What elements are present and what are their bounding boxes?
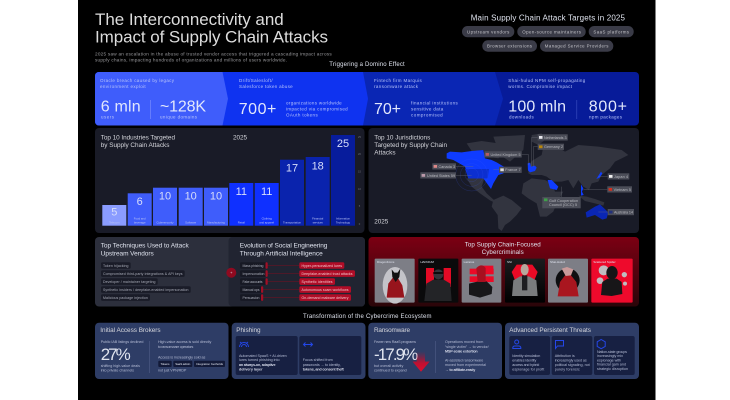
card: identity simulation: Identity simulation	[512, 354, 540, 358]
evolution rows: Impersonation	[242, 272, 265, 276]
card: Scattered Spider	[591, 259, 633, 303]
axis: 20	[358, 152, 361, 156]
card: focus shift	[299, 336, 361, 375]
card: attribution: purely forensic	[555, 367, 580, 371]
heading: evolution	[240, 243, 328, 257]
segment: Drift	[239, 78, 348, 118]
target pills: Upstream vendors	[467, 29, 510, 34]
card: nation-state: Nation-state groups	[597, 350, 627, 354]
country labels: Canada 3	[438, 165, 455, 169]
axis: 0	[359, 222, 361, 226]
axis: 15	[358, 170, 361, 174]
bars: 10	[210, 190, 222, 202]
segment: Oracle: ~128K	[160, 98, 206, 116]
evolution rows: Synthetic identities	[302, 280, 333, 284]
target pills	[462, 26, 634, 52]
card: identity simulation: access and hybrid	[512, 363, 539, 367]
country labels: France 7	[505, 168, 521, 172]
heading: jurisdictions	[374, 134, 447, 156]
card: Lazarus: Lazarus	[464, 260, 475, 264]
bars: Food and	[134, 216, 146, 220]
title: The Interconnectivity and	[95, 10, 284, 29]
axis	[358, 135, 361, 226]
bars: Cybersecurity	[156, 220, 174, 224]
stat: 27%: 27%	[101, 345, 131, 364]
segment: Oracle: Oracle breach caused by legacy	[100, 78, 175, 83]
technique pills: Malicious package injection	[103, 296, 148, 300]
segment: Shai-hulud: 800+	[589, 98, 627, 116]
card: DragonForce: DragonForce	[377, 260, 395, 264]
card: attribution	[552, 336, 592, 375]
technique pills	[101, 262, 191, 301]
stat: 27%: Public IAB listings declined	[101, 340, 143, 344]
segment: Oracle: unique domains	[160, 114, 198, 120]
card: identity simulation: enables identity	[512, 358, 536, 362]
panel: initial access brokers	[95, 323, 228, 379]
access notes: SaaS admin	[175, 362, 191, 366]
heading: evolution: Evolution of Social Engineering	[240, 243, 328, 250]
card: nation-state: strategic disruption	[597, 367, 628, 371]
segment: Shai-hulud: worms. Compromise impact	[508, 84, 573, 89]
heading: techniques	[101, 243, 189, 257]
segment: Oracle	[100, 78, 206, 120]
stat: 27%: into private channels	[101, 368, 134, 372]
icon: user	[513, 340, 521, 348]
card: focus shift: tokens, and consent theft	[303, 367, 344, 371]
card: nation-state: espionage with	[597, 358, 621, 362]
evolution rows: Fake accounts	[242, 280, 263, 284]
heading: jurisdictions: Targeted by Supply Chain	[374, 142, 447, 149]
card: automated SpaaS: delivery layer	[239, 367, 263, 371]
evolution rows: Manual ops	[242, 288, 260, 292]
access notes: Integration footholds	[196, 362, 224, 366]
country labels: Vietnam 5	[614, 188, 631, 192]
heading: cybercriminals: Top Supply Chain-Focused	[465, 242, 541, 248]
country labels	[420, 134, 634, 215]
segment: Drift: OAuth tokens	[286, 112, 318, 118]
ransomware notes	[445, 340, 490, 372]
bars: 11	[261, 186, 272, 198]
technique pills: Token hijacking	[103, 264, 129, 268]
card: nation-state	[594, 336, 635, 375]
ransomware notes: AI-assisted ransomware	[445, 359, 483, 363]
evolution rows: Mass phishing	[242, 264, 264, 268]
card: Lazarus	[462, 259, 501, 303]
segment: Marquis: compromised	[411, 112, 443, 118]
bars: Clothing	[262, 216, 272, 220]
highlighted countries	[447, 150, 608, 220]
card: HAFNIUM	[418, 259, 458, 303]
bars: and apparel	[259, 220, 274, 224]
panel: advanced persistent threats	[505, 323, 639, 379]
card: automated SpaaS: an always-on, adaptive	[239, 363, 276, 367]
stat: -17.9%: continued to expand	[374, 368, 407, 372]
bars: 5	[111, 206, 117, 218]
bars: services	[313, 220, 323, 224]
segment: Marquis: 70+	[374, 101, 401, 118]
segment: Marquis	[374, 78, 458, 118]
segment: Oracle: users	[101, 114, 115, 120]
stat: -17.9%	[374, 340, 418, 372]
AI connector node	[226, 268, 236, 278]
ransomware notes: “single victim” → to vendor/	[445, 345, 490, 349]
segment: Shai-hulud: Shai-hulud NPM self-propagating	[508, 78, 586, 83]
card: Shai-Hulud	[548, 259, 588, 303]
evolution rows	[240, 262, 355, 301]
heading: cybercriminals	[465, 242, 541, 256]
domino banner	[90, 72, 639, 126]
stat: -17.9%: -17.9%	[374, 345, 418, 364]
infographic canvas	[78, 0, 656, 400]
bars: Manufacturing	[207, 220, 225, 224]
evolution rows: Hyper-personalized lures	[302, 264, 342, 268]
segment: Shai-hulud	[508, 78, 627, 120]
evolution rows: Persuasion	[242, 296, 260, 300]
card: identity simulation: espionage for profit	[512, 367, 544, 371]
segment: Drift: Drift/Salesloft/	[239, 78, 273, 83]
AI connector node: +	[230, 270, 233, 275]
country labels: United Kingdom 5	[490, 153, 520, 157]
axis: 10	[358, 187, 361, 191]
bars: Transportation	[283, 220, 301, 224]
card: Shai-Hulud: Shai-Hulud	[550, 260, 565, 264]
segment: Oracle: environment exploit	[100, 84, 146, 89]
panel: cybercriminals	[368, 237, 639, 306]
evolution rows: On-demand malware delivery	[302, 296, 349, 300]
target pills: Browser extensions	[487, 44, 533, 49]
stat: -17.9%: Fewer new RaaS programs	[374, 340, 416, 344]
bars: 10	[185, 190, 197, 202]
ransomware notes: → to affiliate-ready	[445, 368, 476, 372]
heading: Phishing	[236, 327, 261, 334]
segment: Shai-hulud: downloads	[509, 114, 534, 120]
card: focus shift: Focus shifted from	[303, 358, 333, 362]
bars: Software	[185, 220, 197, 224]
stat: 27%	[101, 340, 143, 372]
bars: 6	[137, 196, 143, 208]
criminal cards	[375, 259, 633, 304]
bars: Technology	[336, 220, 351, 224]
card: focus shift: passwords → to identity,	[303, 363, 341, 367]
segment: Shai-hulud: 100 mln	[508, 98, 566, 116]
heading: industries: Top 10 Industries Targeted	[101, 134, 175, 141]
heading: jurisdictions: Top 10 Jurisdictions	[374, 134, 430, 141]
card: attribution: Attribution is	[555, 354, 575, 358]
icon: signal arcs	[240, 342, 248, 347]
icon: chat bubble	[556, 340, 564, 348]
card: HAFNIUM: HAFNIUM	[420, 260, 434, 264]
bars: Financial	[312, 216, 324, 220]
heading: techniques: Upstream Vendors	[101, 250, 154, 257]
bars: 10	[159, 190, 171, 202]
access notes: Tokens	[160, 362, 170, 366]
title: Impact of Supply Chain Attacks	[95, 28, 328, 46]
card: SSI	[505, 259, 545, 303]
bars	[102, 135, 355, 226]
icon: hexagon	[597, 340, 605, 349]
heading: industries: by Supply Chain Attacks	[101, 142, 169, 149]
main targets	[462, 14, 634, 52]
segment: Marquis: financial institutions	[411, 100, 458, 106]
bars: Telecom	[109, 220, 120, 224]
panel: techniques and AI evolution	[95, 237, 365, 306]
icon: double arrow	[304, 342, 312, 346]
intro text: 2025 saw an escalation in the abuse of trusted vendor access that triggered a cascading impact across	[95, 51, 332, 56]
access notes	[158, 340, 225, 373]
card: attribution: increasingly used as	[555, 358, 587, 362]
bars: 18	[312, 160, 324, 172]
heading: industries	[101, 134, 175, 149]
card: automated SpaaS	[236, 336, 298, 375]
access notes: not just VPN/RDP	[158, 369, 187, 373]
heading: techniques: Top Techniques Used to Attack	[101, 243, 189, 250]
stat: -17.9%: but overall activity	[374, 364, 403, 368]
panel: phishing	[232, 323, 366, 379]
ransomware notes: MSP-scale extortion	[445, 350, 478, 354]
ransomware notes: moved from experimental	[445, 363, 486, 367]
segment: Shai-hulud: npm packages	[589, 114, 623, 120]
card: nation-state: increasingly mix	[597, 354, 623, 358]
segment: Drift: impacted via compromised	[286, 106, 348, 112]
panel: jurisdictions map	[368, 128, 639, 233]
segment: Marquis: Fintech firm Marquis	[374, 78, 422, 83]
card: SSI: SSI	[507, 260, 512, 264]
heading: evolution: Through Artificial Intelligence	[240, 250, 323, 257]
heading: main targets: Main Supply Chain Attack Targets in 2025	[471, 14, 626, 22]
target pills: Managed Service Providers	[545, 44, 609, 49]
icon: red down arrow	[412, 352, 430, 372]
bars: 17	[286, 162, 298, 174]
target pills: SaaS platforms	[593, 29, 630, 34]
heading: Ransomware	[374, 327, 410, 334]
bars: 11	[236, 186, 247, 198]
year label: 2025	[233, 134, 247, 141]
card: nation-state: financial gain and	[597, 363, 626, 367]
card: Scattered Spider: Scattered Spider	[593, 260, 616, 264]
country labels: Japan 4	[614, 175, 628, 179]
year label: 2025	[374, 219, 389, 226]
card: identity simulation	[509, 336, 550, 375]
target pills: Open-source maintainers	[522, 29, 582, 34]
axis: 5	[359, 204, 361, 208]
bars: beverage	[134, 220, 146, 224]
segment: Drift: 700+	[239, 101, 276, 118]
title	[95, 10, 328, 46]
panel: ransomware	[368, 323, 502, 379]
bars: Information	[336, 216, 350, 220]
country labels: Gulf Cooperation	[549, 199, 578, 203]
segment: Oracle: 6 mln	[101, 98, 141, 116]
country labels: Council (GCC) 5	[549, 203, 577, 207]
access notes: to ransomware operators	[158, 345, 193, 349]
evolution rows: Autonomous scam workflows	[302, 288, 349, 292]
intro text	[95, 51, 332, 62]
segment: Marquis: ransomware attack	[374, 84, 419, 89]
card: attribution: political signaling, not	[555, 363, 590, 367]
card: DragonForce	[375, 259, 415, 304]
bars: Retail	[238, 220, 245, 224]
card: automated SpaaS: lures turned phishing into	[239, 358, 280, 362]
segment: Marquis: sensitive data	[411, 106, 444, 112]
technique pills: Compromised third-party integrations & API keys	[103, 272, 183, 276]
heading: cybercriminals: Cybercriminals	[482, 249, 524, 256]
heading: ecosystem: Transformation of the Cybercrime Ecosystem	[303, 314, 432, 320]
technique pills: Developer / maintainer targeting	[103, 280, 156, 284]
card: automated SpaaS: Automated SpaaS + AI-driven	[239, 354, 287, 358]
technique pills: Synthetic insiders / deepfake-enabled impersonation	[103, 288, 189, 292]
panel: industries bar chart	[95, 128, 364, 233]
ransomware notes: Operations moved from	[445, 340, 483, 344]
stat: 27%: shifting high-value deals	[101, 364, 140, 368]
world map	[447, 133, 628, 231]
country labels: Netherlands 3	[544, 136, 566, 140]
segment: Drift: organizations worldwide	[286, 100, 342, 106]
access notes: Access is increasingly sold as	[158, 356, 205, 360]
country labels: Australia 14	[614, 210, 633, 214]
intro text: supply chains, impacting hundreds of organizations and millions of users worldwide.	[95, 57, 287, 62]
heading: domino effect: Triggering a Domino Effect	[329, 62, 405, 68]
bars: 25	[337, 138, 349, 150]
heading: jurisdictions: Attacks	[374, 150, 396, 156]
segment: Drift: Salesforce token abuse	[239, 84, 293, 89]
country labels: Germany 2	[544, 145, 563, 149]
country labels: United States 59	[427, 174, 455, 178]
access notes: High-value access is sold directly	[158, 340, 211, 344]
heading: Advanced Persistent Threats	[509, 327, 591, 334]
axis: 25	[358, 135, 361, 139]
evolution rows: Deepfake-enabled trust attacks	[302, 272, 353, 276]
heading: Initial Access Brokers	[100, 327, 161, 334]
